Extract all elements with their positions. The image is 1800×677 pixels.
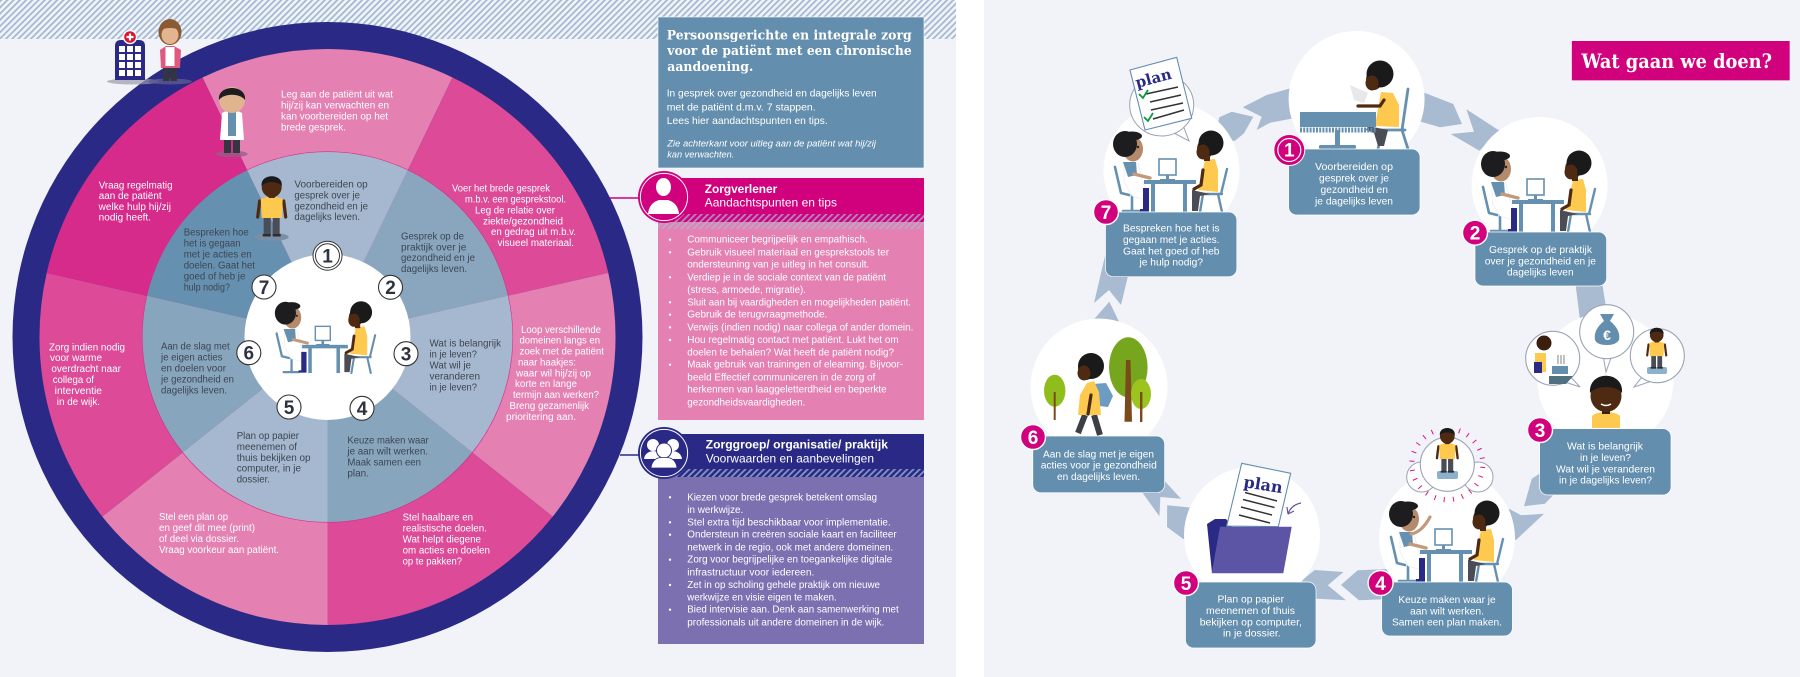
bubble circle xyxy=(1184,467,1320,603)
step 4 xyxy=(1368,428,1515,636)
step 6 xyxy=(1020,318,1168,493)
bullet list: Maak gebruik van trainingen of elearning. Bijvoor- xyxy=(687,360,903,371)
text: blue wedge 1: Voorbereiden op xyxy=(294,180,368,191)
illustration: trees xyxy=(1044,337,1151,422)
white centre xyxy=(244,254,410,420)
step 5 xyxy=(1174,463,1320,648)
arrow 7 to 1 xyxy=(1215,87,1295,141)
text: blue wedge 5: dossier. xyxy=(237,475,270,486)
box text: gezondheid en xyxy=(1320,184,1388,196)
illustration: reading patient xyxy=(1300,60,1408,149)
text: blue wedge 2: Gesprek op de xyxy=(401,231,464,242)
number badge: 3 xyxy=(1535,421,1545,442)
text: pink wedge 4 xyxy=(403,512,490,567)
bullet list: Communiceer begrijpelijk en empathisch. xyxy=(687,235,868,246)
text: pink wedge 1: hij/zij kan verwachten en xyxy=(281,101,389,112)
text: pink wedge 2: Leg de relatie over xyxy=(475,205,556,216)
illustration: plan in folder: plan xyxy=(1242,472,1284,497)
text: pink wedge 5 xyxy=(159,512,279,556)
text: blue wedge 1: gezondheid en je xyxy=(294,202,368,213)
number badge xyxy=(1174,570,1198,596)
bullet list xyxy=(670,235,913,408)
intro text xyxy=(667,88,877,127)
header text: Aandachtspunten en tips xyxy=(705,196,837,210)
box text: gegaan met je acties. xyxy=(1123,234,1220,246)
intro text: In gesprek over gezondheid en dagelijks leven xyxy=(667,88,877,100)
box text: Wat wil je veranderen xyxy=(1556,463,1655,475)
number badge: 6 xyxy=(1028,428,1038,449)
text: pink wedge 4: realistische doelen. xyxy=(403,523,487,534)
arrow 4 to 5 xyxy=(1300,569,1395,600)
header text: Voorwaarden en aanbevelingen xyxy=(706,451,874,465)
icon: woman patient xyxy=(148,19,192,84)
bullet list: Zorg voor begrijpelijke en toegankelijke digitale xyxy=(687,555,893,566)
box text: in je dossier. xyxy=(1223,628,1281,640)
text: blue wedge 3: veranderen xyxy=(430,371,480,382)
illustration: plan in folder xyxy=(1207,463,1301,573)
icon: patient standing xyxy=(255,176,289,241)
connector line: zorggroep xyxy=(620,454,642,456)
text: blue wedge 1 xyxy=(294,180,368,223)
italic note: Zie achterkant voor uitleg aan de patiënt wat hij/zij xyxy=(666,139,877,149)
text: blue wedge 6: Aan de slag met xyxy=(161,342,230,353)
text: pink wedge 6: in de wijk. xyxy=(57,397,100,408)
text box xyxy=(1382,582,1512,636)
header hatch band xyxy=(658,214,924,229)
bullet list: werkwijze en visie eigen te maken. xyxy=(686,592,837,603)
bullet list: Sluit aan bij vaardigheden en mogelijkheden patiënt. xyxy=(687,297,911,308)
bullet list: in werkwijze. xyxy=(687,505,743,516)
icon: doctor figure xyxy=(216,87,248,157)
number badge: 7 xyxy=(1101,203,1111,224)
bullet list: professionals uit andere domeinen in de wijk. xyxy=(687,617,884,628)
box text: gesprek over je xyxy=(1319,173,1389,185)
step numbers in wheel: 4 xyxy=(357,399,368,420)
number badge xyxy=(1462,220,1488,245)
box text: in je leven? xyxy=(1580,452,1631,464)
panel body xyxy=(658,222,924,420)
text: blue wedge 4: Maak samen een xyxy=(347,457,421,468)
text: pink wedge 2: Voer het brede gesprek xyxy=(452,184,551,195)
bubble circle xyxy=(1030,318,1168,456)
number badge xyxy=(1020,424,1046,450)
text: blue wedge 5: Plan op papier xyxy=(237,431,300,442)
text: pink wedge 6 xyxy=(49,342,125,408)
bullet list: Hou regelmatig contact met patiënt. Lukt het om xyxy=(687,335,899,346)
text: blue wedge 3: in je leven? xyxy=(430,382,477,393)
heading: wat gaan we doen: Wat gaan we doen? xyxy=(1581,49,1772,73)
step 2 xyxy=(1462,117,1608,286)
arrow 5 to 6 xyxy=(1142,480,1195,545)
text: pink wedge 4: om acties en doelen xyxy=(403,545,490,556)
text: pink wedge 3: zoek met de patiënt xyxy=(520,346,604,357)
icon: group silhouette xyxy=(638,427,690,479)
thought bubble: scale and rays xyxy=(1407,428,1493,502)
bullet list: (stress, armoede, migratie). xyxy=(687,285,806,296)
text: blue wedge 7: met je acties en xyxy=(184,250,252,261)
text: pink wedge 5: en geef dit mee (print) xyxy=(159,523,255,534)
box text: meenemen of thuis xyxy=(1206,605,1295,617)
box text: je hulp nodig? xyxy=(1139,257,1203,269)
text: blue wedge 6: je gezondheid en xyxy=(160,374,234,385)
step 7 xyxy=(1094,57,1240,277)
bullet list: doelen te behalen? Wat heeft de patiënt nodig? xyxy=(687,347,894,358)
text: blue wedge 5: thuis bekijken op xyxy=(237,453,311,464)
text: blue wedge 6: je eigen acties xyxy=(160,353,223,364)
bullet list: Zet in op scholing gehele praktijk om nieuwe xyxy=(687,580,880,591)
arrow 6 to 7 xyxy=(1092,256,1128,325)
box text: je dagelijks leven xyxy=(1314,195,1393,207)
box text: dagelijks leven xyxy=(1507,267,1574,279)
box text: Plan op papier xyxy=(1218,594,1284,606)
text: pink wedge 7 xyxy=(98,180,172,224)
box text: Keuze maken waar je xyxy=(1398,594,1496,606)
text: blue wedge 1: gesprek over je xyxy=(294,191,360,202)
thought bubble: money: € xyxy=(1603,327,1611,343)
illustration: conversation at desk xyxy=(1113,130,1227,212)
text: blue wedge 7: goed of heb je xyxy=(184,271,246,282)
box text: Gaat het goed of heb xyxy=(1123,245,1220,257)
text: pink wedge 4: op te pakken? xyxy=(403,556,462,567)
panel heading: aandoening. xyxy=(667,60,753,75)
number badge: 4 xyxy=(1375,574,1386,595)
thought bubble: plan checklist: plan xyxy=(1133,65,1174,92)
number badge xyxy=(1528,418,1552,442)
text: pink wedge 7: welke hulp hij/zij xyxy=(98,202,171,213)
background: left page xyxy=(0,0,956,677)
text: pink wedge 6: overdracht naar xyxy=(51,364,122,375)
box text: aan wilt werken. xyxy=(1410,605,1484,617)
number badge: 1 xyxy=(1284,140,1295,162)
box text: Gesprek op de praktijk xyxy=(1489,244,1593,256)
background: right page xyxy=(984,0,1800,677)
text: blue wedge 2 xyxy=(401,231,475,275)
step numbers in wheel: 6 xyxy=(244,344,254,364)
box text: Samen een plan maken. xyxy=(1392,617,1502,629)
box text: bekijken op computer, xyxy=(1200,616,1302,628)
number badge xyxy=(1094,200,1118,224)
text: pink wedge 6: Zorg indien nodig xyxy=(49,342,125,353)
arrow 1 to 2 xyxy=(1415,90,1499,151)
connector line: zorgverlener xyxy=(580,197,642,199)
box text: over je gezondheid en je xyxy=(1485,255,1596,267)
text: pink wedge 2: ziekte/gezondheid xyxy=(483,216,563,227)
text: pink wedge 7: nodig heeft. xyxy=(99,212,151,224)
bullet list: beeld Effectief communiceren in de zorg of xyxy=(687,372,876,383)
text: pink wedge 1 xyxy=(281,90,393,133)
text box xyxy=(1033,436,1165,493)
step 3 xyxy=(1526,305,1684,495)
illustration: walking patient xyxy=(1078,353,1113,435)
text: pink wedge 4: Stel haalbare en xyxy=(403,512,473,523)
number badge: 5 xyxy=(1181,574,1192,595)
text: pink wedge 3: korte en lange xyxy=(515,379,577,390)
box text: Voorbereiden op xyxy=(1315,161,1393,173)
panel heading: Persoonsgerichte en integrale zorg xyxy=(667,28,912,43)
thought bubble: on scale xyxy=(1630,328,1684,387)
intro text: Lees hier aandachtspunten en tips. xyxy=(667,115,828,127)
arrow 2 to 3 xyxy=(1575,280,1608,320)
text box xyxy=(1186,582,1316,648)
box text: acties voor je gezondheid xyxy=(1041,460,1157,472)
bullet list: Stel extra tijd beschikbaar voor implementatie. xyxy=(687,517,891,528)
text: pink wedge 3: naar haakjes: xyxy=(518,357,576,368)
bullet list: herkennen van laaggeletterdheid en beperkte xyxy=(687,385,887,396)
text: blue wedge 4: plan. xyxy=(347,468,369,479)
number badge: 2 xyxy=(1470,224,1480,244)
box text: in je dagelijks leven? xyxy=(1559,475,1652,487)
bullet list: Verwijs (indien nodig) naar collega of ander domein. xyxy=(687,322,913,333)
text: blue wedge 2: gezondheid en je xyxy=(401,253,475,264)
text: blue wedge 7: het is gegaan xyxy=(184,239,240,250)
panel header xyxy=(658,434,924,477)
text box xyxy=(1289,149,1420,215)
text: blue wedge 6 xyxy=(160,342,234,396)
step numbers in wheel: 7 xyxy=(259,278,269,299)
text: pink wedge 6: voor warme xyxy=(50,353,102,364)
text: blue wedge 3: in je leven? xyxy=(430,350,477,361)
icon: doctor silhouette xyxy=(638,171,690,223)
arrows between steps xyxy=(1092,87,1608,600)
panel: zorggroep xyxy=(638,427,924,644)
bullet list xyxy=(670,492,899,628)
text: blue wedge 3: Wat wil je xyxy=(430,361,471,372)
header text: Zorggroep/ organisatie/ praktijk xyxy=(706,438,888,452)
text: pink wedge 4: Wat helpt diegene xyxy=(403,534,481,545)
centre scene: doctor and patient at desk xyxy=(275,301,375,373)
text: pink wedge 3: prioritering aan. xyxy=(506,412,576,423)
bubble circle xyxy=(1538,313,1674,449)
text: blue wedge 7: Bespreken hoe xyxy=(184,228,249,239)
box text: Bespreken hoe het is xyxy=(1123,223,1220,235)
heading: wat gaan we doen xyxy=(1572,41,1790,81)
text: blue wedge 7 xyxy=(184,228,255,293)
bubble circle xyxy=(1472,117,1608,253)
text box xyxy=(1106,212,1237,277)
text: pink wedge 2 xyxy=(452,184,576,249)
text: blue wedge 3 xyxy=(430,339,502,393)
outer navy ring xyxy=(12,22,642,652)
text: pink wedge 6: interventie xyxy=(55,386,102,397)
text: pink wedge 5: of deel via dossier. xyxy=(159,534,239,545)
text: pink wedge 1: brede gesprek. xyxy=(281,122,346,133)
text: pink wedge 5: Vraag voorkeur aan patiënt. xyxy=(159,545,279,556)
bullet list: ondersteuning van je uitleg in het consult. xyxy=(687,260,869,271)
bubble circle xyxy=(1289,31,1425,167)
text: blue wedge 5 xyxy=(237,431,311,486)
arrow 3 to 4 xyxy=(1505,470,1558,540)
blue ring: seven wedges xyxy=(142,151,513,523)
thought bubble: money xyxy=(1580,305,1634,372)
number badge xyxy=(1368,570,1393,596)
text: pink wedge 5: Stel een plan op xyxy=(159,512,228,523)
pink ring: seven wedges xyxy=(39,49,616,625)
italic note xyxy=(666,139,877,160)
text: blue wedge 7: doelen. Gaat het xyxy=(184,261,255,272)
hatched top strip xyxy=(0,0,956,39)
bullet list: Kiezen voor brede gesprek betekent omslag xyxy=(687,492,877,503)
step 1 xyxy=(1274,31,1425,215)
bullet list: gezondheidsvaardigheden. xyxy=(687,397,805,408)
text: pink wedge 2: visueel materiaal. xyxy=(498,238,574,249)
text: blue wedge 4: je aan wilt werken. xyxy=(346,447,428,458)
header text xyxy=(705,182,837,210)
header text xyxy=(706,438,888,465)
text: blue wedge 6: dagelijks leven. xyxy=(161,385,227,396)
illustration: conversation at desk xyxy=(1481,150,1595,232)
text: pink wedge 3: waar wil hij/zij op xyxy=(515,368,591,379)
panel: intro xyxy=(658,17,924,168)
illustration: doctor pointing with patient xyxy=(1389,500,1503,582)
text: pink wedge 3: Breng gezamenlijk xyxy=(510,401,590,412)
text: pink wedge 3: Loop verschillende xyxy=(521,325,601,336)
text: pink wedge 1: kan voorbereiden op het xyxy=(281,112,388,122)
text: pink wedge 1: Leg aan de patiënt uit wat xyxy=(281,90,393,101)
bullet list: Verdiep je in de sociale context van de patiënt xyxy=(687,272,886,283)
bullet list: Ondersteun in creëren sociale kaart en faciliteer xyxy=(687,530,897,541)
text: blue wedge 5: meenemen of xyxy=(237,442,297,453)
number badge xyxy=(1274,134,1305,166)
text: pink wedge 2: en gedrag uit m.b.v. xyxy=(491,227,576,238)
step numbers in wheel: 3 xyxy=(401,344,411,366)
text: blue wedge 4: Keuze maken waar xyxy=(347,436,429,447)
text: pink wedge 3: termijn aan werken? xyxy=(513,390,599,401)
text box xyxy=(1475,232,1607,286)
step numbers in wheel: 2 xyxy=(385,278,396,299)
bullet list: netwerk in de regio, ook met andere domeinen. xyxy=(687,542,893,553)
box text xyxy=(1485,244,1596,279)
text: blue wedge 5: computer, in je xyxy=(237,464,301,475)
panel body xyxy=(658,477,924,644)
text: pink wedge 6: collega of xyxy=(53,375,94,386)
step numbers in wheel: 1 xyxy=(322,246,333,268)
text: pink wedge 3 xyxy=(506,325,604,423)
text box xyxy=(1540,429,1671,495)
step numbers in wheel xyxy=(237,241,418,420)
intro text: met de patiënt d.m.v. 7 stappen. xyxy=(667,101,816,113)
bullet list: Bied intervisie aan. Denk aan samenwerking met xyxy=(687,605,899,616)
panel header xyxy=(658,178,924,222)
step numbers in wheel: 5 xyxy=(284,398,295,419)
box text: en dagelijks leven. xyxy=(1057,471,1140,483)
bullet list: Gebruik de terugvraagmethode. xyxy=(687,310,827,321)
bubble circle xyxy=(1379,470,1515,606)
header text: Zorgverlener xyxy=(705,182,778,196)
thought bubble: plan checklist xyxy=(1130,57,1194,141)
panel heading xyxy=(666,28,912,75)
box text xyxy=(1041,448,1157,483)
text: blue wedge 1: dagelijks leven. xyxy=(294,212,360,223)
text: pink wedge 7: Vraag regelmatig xyxy=(99,180,172,191)
text: blue wedge 3: Wat is belangrijk xyxy=(430,339,502,350)
text: pink wedge 7: aan de patiënt xyxy=(99,191,162,202)
text: blue wedge 2: praktijk over je xyxy=(401,242,467,253)
header hatch band xyxy=(658,469,924,477)
wheel diagram xyxy=(12,22,642,652)
box text xyxy=(1123,223,1220,269)
icon: hospital xyxy=(107,30,159,84)
text: blue wedge 2: dagelijks leven. xyxy=(401,264,467,275)
box text xyxy=(1314,161,1393,207)
text: pink wedge 3: domeinen langs en xyxy=(520,336,600,347)
text: pink wedge 2: m.b.v. een gesprekstool. xyxy=(465,195,566,206)
box text xyxy=(1200,594,1302,640)
text: blue wedge 4 xyxy=(346,436,429,479)
text: blue wedge 7: hulp nodig? xyxy=(184,282,230,293)
text: blue wedge 6: en doelen voor xyxy=(161,364,227,375)
thought bubble: cooking xyxy=(1526,331,1580,387)
illustration: patient portrait xyxy=(1590,376,1622,428)
box text: Wat is belangrijk xyxy=(1567,441,1644,453)
italic note: kan verwachten. xyxy=(667,150,734,160)
box text xyxy=(1556,441,1655,487)
panel: zorgverlener xyxy=(638,171,924,420)
bubble circle xyxy=(1104,103,1240,239)
bullet list: infrastructuur voor iedereen. xyxy=(687,567,814,578)
box text xyxy=(1392,594,1502,629)
panel heading: voor de patiënt met een chronische xyxy=(666,44,912,59)
box text: Aan de slag met je eigen xyxy=(1043,448,1154,460)
bullet list: Gebruik visueel materiaal en gesprekstools ter xyxy=(687,247,890,258)
